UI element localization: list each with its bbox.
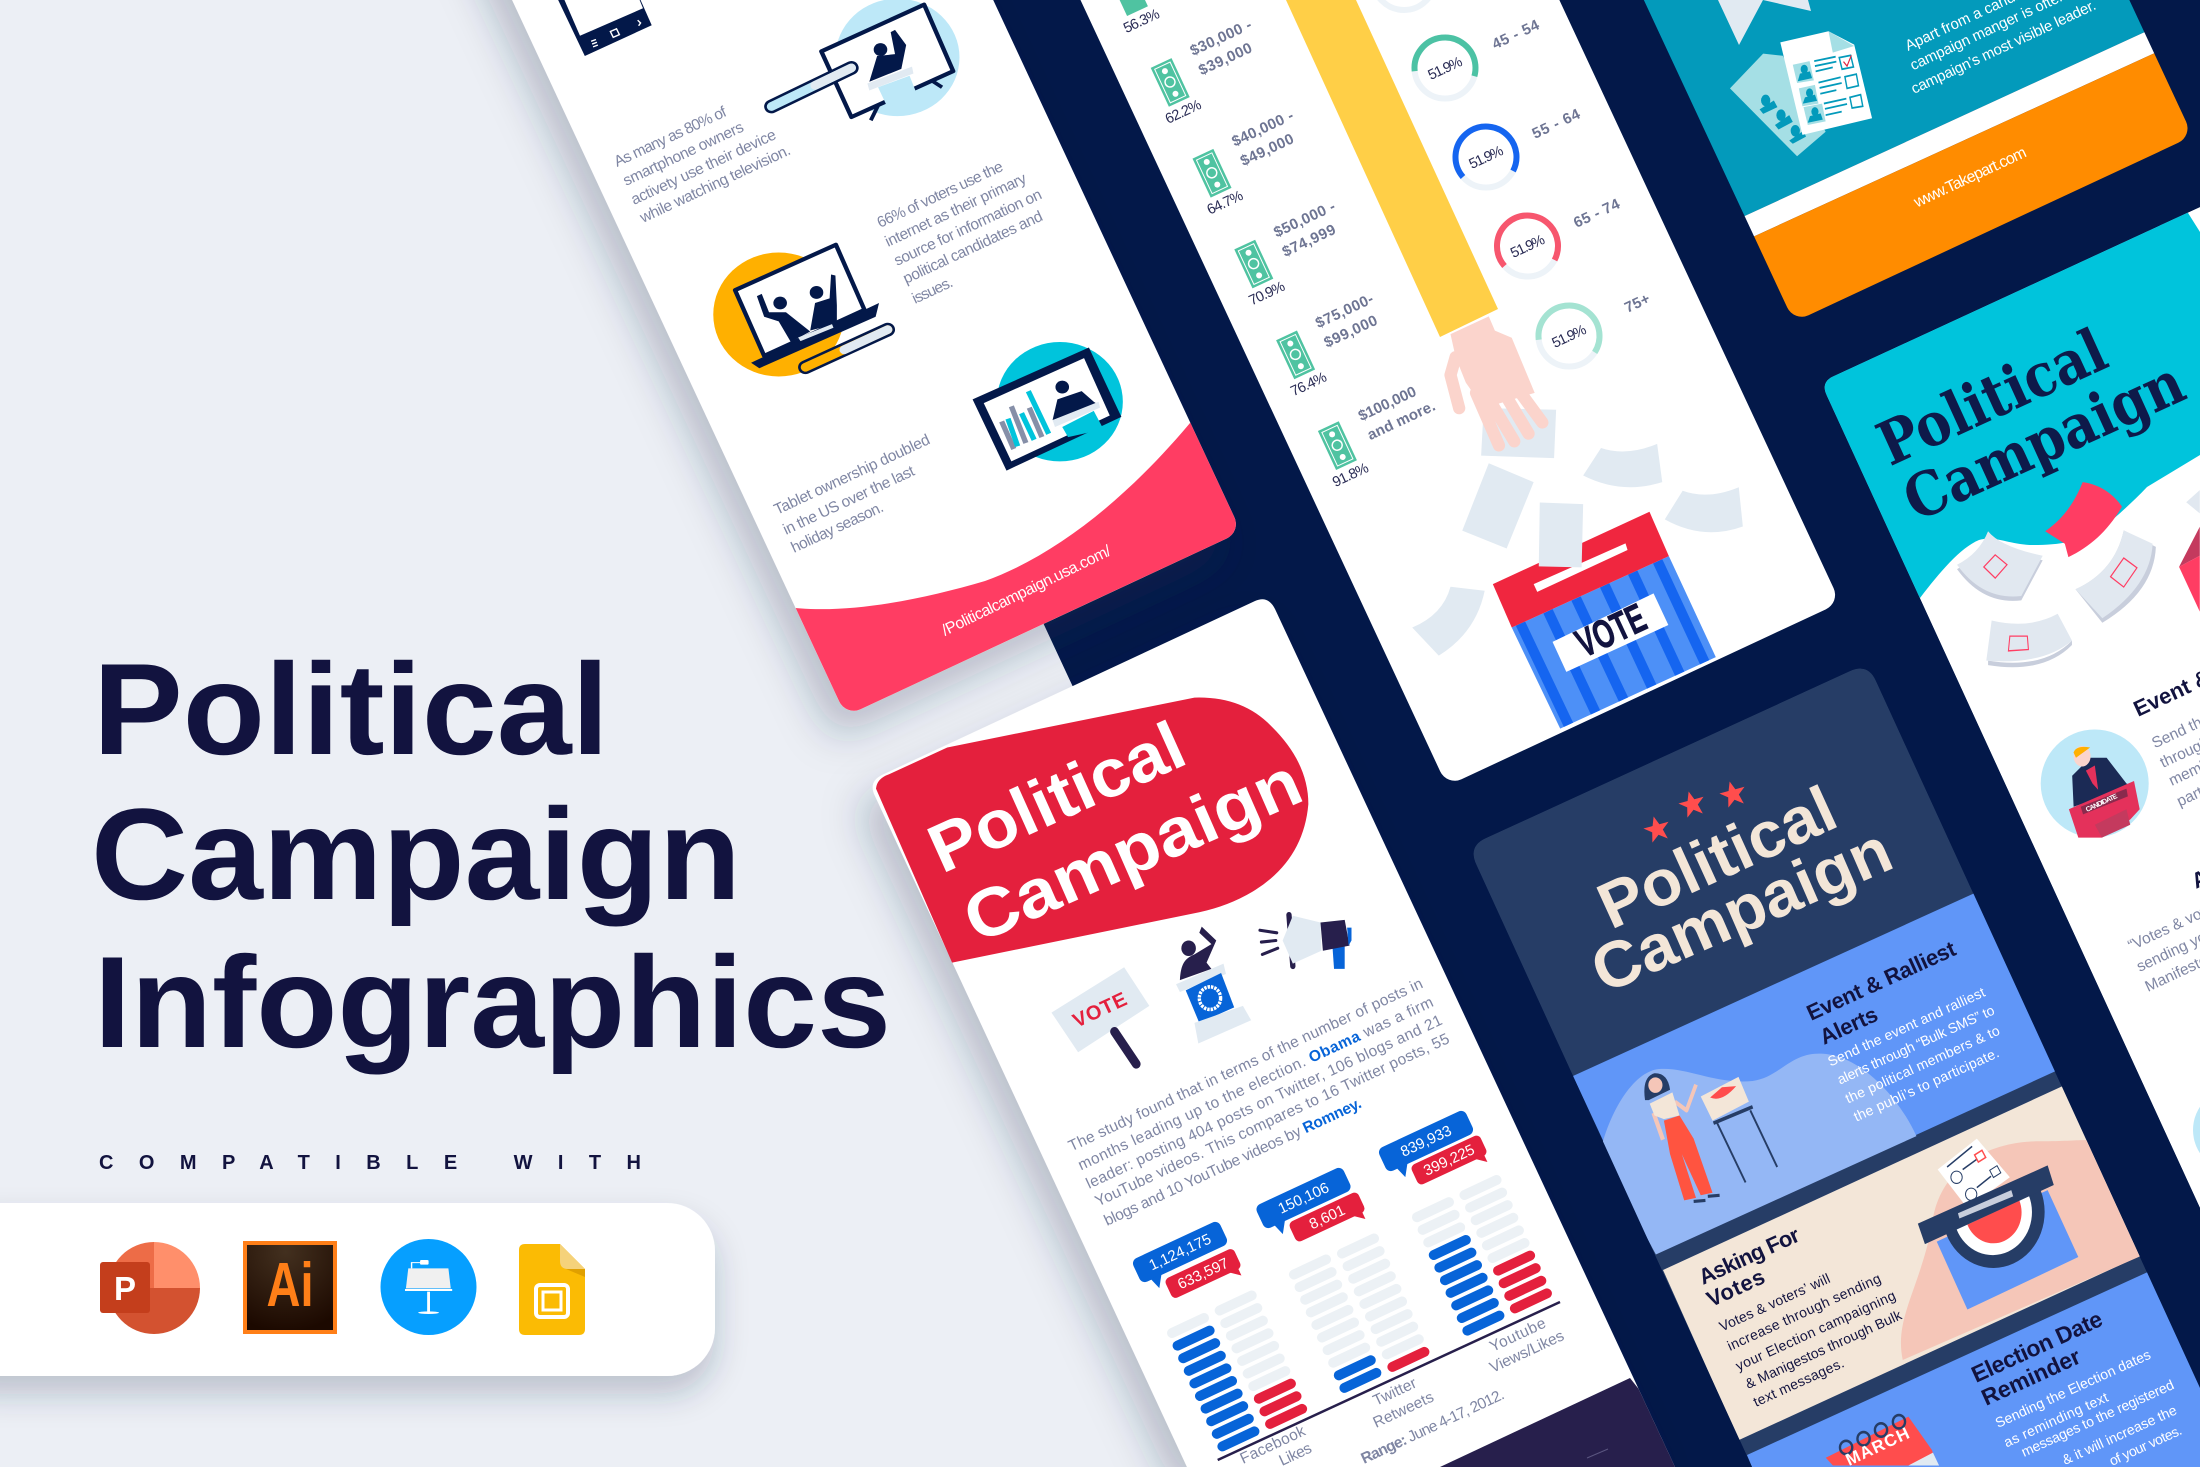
label 65-74: 65 - 74 [1571,195,1623,232]
label views: Views/Likes [1487,1327,1567,1377]
income row 30-39k: $30,000 - [1188,16,1255,60]
poster title 1: Political [917,707,1196,888]
asking text 3: your Election campaigning [1733,1287,1898,1374]
navy backdrop [753,0,2200,1467]
income row 30-39k [1151,16,1255,128]
bubble 8,601 [1288,1191,1369,1249]
poster contents [1440,1378,1700,1467]
icon: illustrator [245,1243,335,1332]
yellow arm [1286,0,1498,337]
bubble 633,597 [1164,1247,1245,1306]
income row 40-49k [1193,107,1297,218]
title line 1: Political [1867,316,2117,480]
text 80 percent [612,103,793,227]
podium speaker [1176,927,1251,1043]
text 80 percent: smartphone owners [621,119,747,190]
ring 75+: 51.9% [1550,322,1589,352]
red title shape [876,697,1308,963]
bubble 1,124,175: 1,124,175 [1146,1231,1214,1274]
text 66 percent: issues. [910,274,956,308]
ring 75+ [1535,302,1603,370]
paragraph: blogs and 10 YouTube videos by Romney. [1102,1095,1364,1230]
text 80 percent: while watching television. [637,142,793,227]
election text 1: Sending the Election dates [1993,1346,2153,1431]
bubble 8,601: 8,601 [1307,1202,1348,1233]
bubble 150,106: 150,106 [1276,1179,1332,1218]
bubble 399,225 [1410,1134,1491,1192]
asking text 5: text messages. [1751,1355,1846,1410]
income row 40-49k: $40,000 - [1229,107,1296,150]
ring 45-54 [1411,34,1479,102]
income row 50-74k: $50,000 - [1271,198,1338,241]
device illustrations [558,0,1123,471]
text 80 percent: As many as 80% of [612,103,730,171]
event heading: Event & Ralliest [1803,936,1960,1026]
red footer [780,417,1300,800]
text 66 percent: source for information on [892,186,1045,270]
label 75+: 75+ [1622,290,1653,317]
label 55-64: 55 - 64 [1530,105,1584,143]
text tablet [772,431,933,557]
dark panel [1474,669,2200,1467]
label facebook: Facebook [1238,1423,1308,1467]
card footer and icons [558,0,1300,800]
card: top-left white with devices [466,0,1241,716]
income row 75-99k [1276,290,1380,400]
facebook bars [1172,1296,1302,1446]
label retweets: Retweets [1371,1389,1437,1432]
compatibility panel [0,1203,715,1376]
text 80 percent: activety use their device [629,126,779,209]
cream section [1663,1085,2142,1440]
asking heading line 2: Votes [1703,1264,1769,1312]
ring 55-64 [1443,114,1529,200]
income row 100k plus: $100,000 [1356,383,1419,425]
event text 1: Send the event and ralliest [1825,984,1987,1069]
icon: illustrator: Ai [266,1251,314,1320]
income row 30-39k: $39,000 [1196,40,1255,79]
card: income and age infographic [1024,0,1840,786]
asking heading: Asking For [1695,1222,1804,1290]
income row 50-74k: 70.9% [1247,279,1288,309]
bubble 150,106 [1255,1166,1357,1240]
paragraph: months leading up to the election. Obama was a firm [1076,994,1436,1174]
asking text 2: increase through sending [1725,1270,1883,1354]
cyan header [1800,205,2200,598]
paragraph: YouTube videos. This compares to 16 Twitter posts, 55 [1093,1030,1452,1210]
card: teal campaign manager [1644,0,2188,317]
twitter bars [1294,1238,1424,1388]
paragraph [1066,975,1452,1230]
event heading line 2: Alerts [1816,1002,1882,1050]
ring 65-74: 51.9% [1508,232,1548,262]
ribbon [1718,0,1811,45]
icon: powerpoint [100,1242,200,1334]
bubble 399,225: 399,225 [1421,1141,1477,1180]
election text 2: as reminding text [2001,1389,2111,1450]
poster illustrations [876,697,1351,1064]
income row 100k plus [1318,383,1438,491]
election heading line 2: Reminder [1977,1343,2085,1411]
card: red campaign poster [873,599,1675,1467]
income row 75-99k: $75,000- [1313,290,1376,332]
asking text 1: Votes & voters’ will [1717,1270,1832,1334]
text tablet: in the US over the last [781,462,918,539]
event text 2: alerts through “Bulk SMS” to [1835,1002,1997,1087]
income row 100k plus: 91.8% [1330,460,1371,491]
vote label: VOTE [1569,596,1653,666]
stars [1641,778,1749,844]
main title: Infographics [94,929,891,1075]
income row 30-39k: 62.2% [1163,97,1204,128]
ring 65-74 [1484,203,1571,289]
flying ballots [1957,482,2200,667]
text tablet: holiday season. [789,499,886,557]
candidate avatar: CANDIDATE [2085,793,2119,814]
ring 45-54: 51.9% [1426,54,1465,84]
asking text 4: & Manigestos through Bulk [1743,1306,1905,1392]
income row 75-99k: 76.4% [1288,369,1330,400]
partial ring top [1373,0,1435,10]
income row 40-49k: 64.7% [1205,188,1246,218]
bubble 633,597: 633,597 [1175,1255,1231,1293]
youtube bars [1417,1180,1547,1331]
lower blue section [1747,1271,2200,1467]
ring 55-64: 51.9% [1467,143,1506,173]
label 45-54: 45 - 54 [1490,16,1543,53]
range note: Range: June 4-17, 2012. [1359,1386,1507,1467]
income row 56.3%: 56.3% [1121,6,1162,37]
url text: /Politicalcampaign.usa.com/ [939,543,1114,640]
footer url: www.Takepart.com [1911,144,2029,212]
main title: Campaign [91,781,741,927]
text 66 percent: political candidates and [901,208,1045,288]
icon: keynote [380,1239,476,1335]
income row 50-74k: $74,999 [1280,221,1338,261]
blue section [1573,894,2055,1141]
label youtube: Youtube [1487,1315,1549,1356]
panel title 1: Political [1587,771,1847,943]
election heading: Election Date [1967,1305,2106,1388]
megaphone [1260,915,1351,969]
section illustrations [1600,1054,2142,1466]
election text 4: & it will increase the [2060,1402,2179,1467]
vote sign [1051,967,1149,1052]
text 66 percent [875,158,1045,308]
candidate avatar [2041,730,2149,838]
election text 3: messages to the registered [2019,1376,2176,1460]
bar chart [1131,1109,1567,1467]
panel title 2: Campaign [1580,813,1902,1007]
axis [1218,1302,1560,1460]
compatible with label: COMPATIBLE WITH [99,1152,641,1174]
main title: Political [93,636,609,782]
bubble 839,933: 839,933 [1398,1122,1454,1161]
bubble 1,124,175 [1131,1220,1234,1294]
main title [91,636,891,1075]
income row 56.3% [1109,0,1162,37]
purple footer [1440,1378,1700,1467]
text 66 percent: internet as their primary [883,170,1029,251]
bubble 839,933 [1377,1109,1480,1183]
icon: powerpoint: P [114,1270,136,1307]
text 66 percent: 66% of voters use the [875,158,1006,232]
income row 50-74k [1234,198,1338,309]
income row 75-99k: $99,000 [1321,312,1380,352]
event text 3: the political members & to [1843,1022,2002,1106]
card: cyan political campaign [1800,205,2200,1208]
paragraph: The study found that in terms of the number of posts in [1066,975,1426,1155]
income row 100k plus: and more. [1365,398,1438,444]
poster title 2: Campaign [952,743,1313,958]
sign vote text: VOTE [1070,989,1130,1033]
text tablet: Tablet ownership doubled [772,431,933,519]
income row 40-49k: $49,000 [1238,130,1297,170]
label twitter: Twitter [1371,1375,1419,1410]
icon: google slides [519,1244,585,1335]
paragraph: leader: posting 404 posts on Twitter, 106 blogs and 21 [1084,1012,1445,1193]
ballots and hand [1412,316,1743,729]
event text 4: the publi’s to participate. [1851,1044,2001,1124]
candidate papers [1730,31,1872,156]
partial icon [2193,1107,2200,1153]
